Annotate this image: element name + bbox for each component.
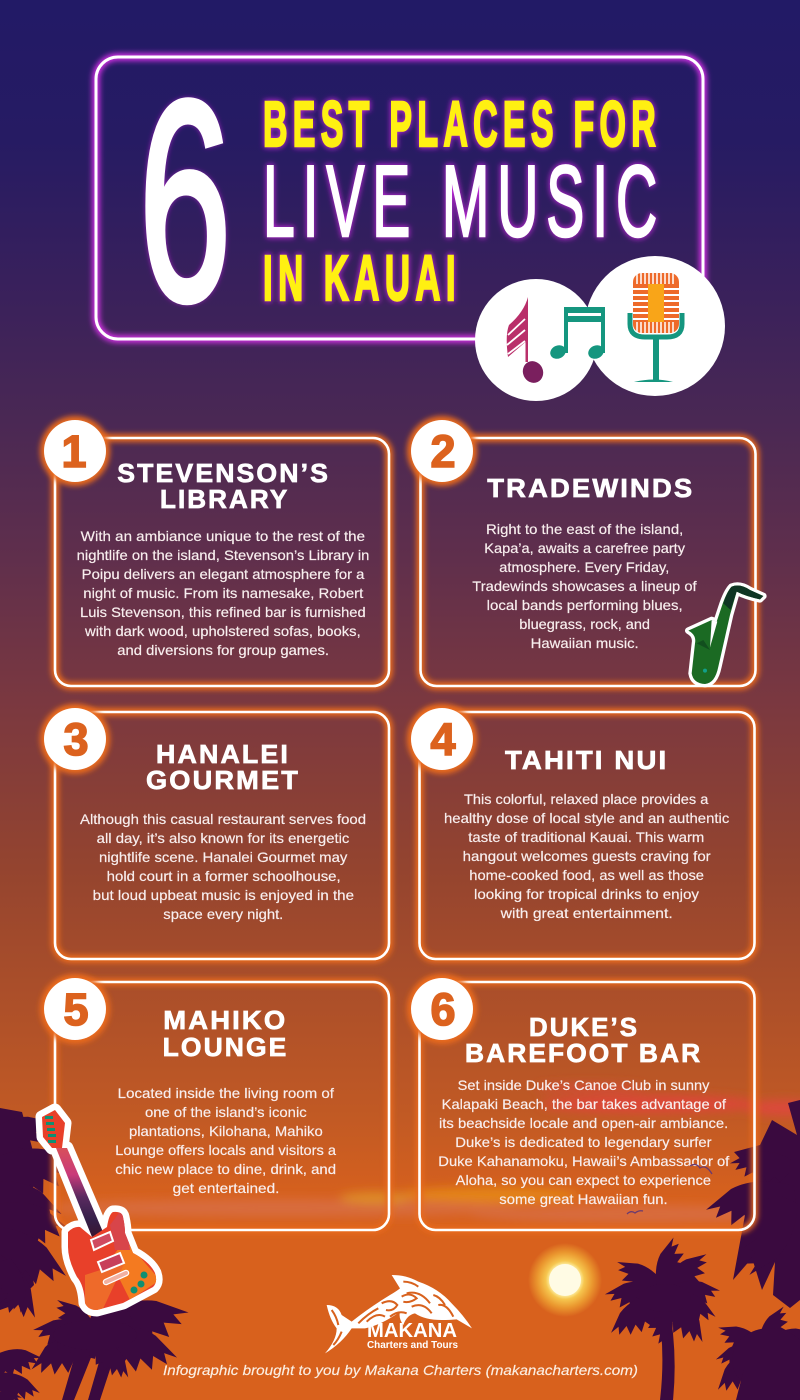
number badge 2: 2: [430, 426, 456, 477]
heading: GOURMET: [146, 767, 300, 795]
body text: Set inside Duke’s Canoe Club in sunny: [458, 1077, 709, 1093]
body text: Aloha, so you can expect to experience: [456, 1172, 711, 1188]
heading: [146, 741, 300, 795]
number badge 5: [40, 974, 110, 1044]
body text: night of music. From its namesake, Robert: [83, 585, 363, 601]
footer credit: Infographic brought to you by Makana Charters (makanacharters.com): [163, 1363, 638, 1378]
body text: plantations, Kilohana, Mahiko: [129, 1123, 323, 1139]
heading: TAHITI NUI: [505, 747, 668, 775]
body text: [444, 791, 729, 921]
icon: teal beamed notes: [548, 307, 606, 361]
body text: space every night.: [163, 906, 283, 922]
panel: Tradewinds: [407, 416, 763, 686]
panel: Mahiko Lounge: [40, 974, 389, 1230]
panel: Tahiti Nui: [407, 704, 754, 959]
body text: [80, 811, 366, 922]
title: [139, 43, 665, 360]
body text: nightlife scene. Hanalei Gourmet may: [99, 849, 347, 865]
body text: [438, 1077, 729, 1207]
body text: This colorful, relaxed place provides a: [464, 791, 709, 807]
heading: STEVENSON’S: [117, 460, 330, 488]
body text: Kapa’a, awaits a carefree party: [484, 540, 685, 556]
body text: one of the island’s iconic: [145, 1104, 307, 1120]
body text: chic new place to dine, drink, and: [115, 1161, 336, 1177]
heading: MAHIKO: [163, 1007, 287, 1035]
panel: Stevenson's Library: [40, 416, 389, 686]
title: IN KAUAI: [263, 242, 461, 314]
body text: get entertained.: [173, 1180, 279, 1196]
heading: [163, 1007, 288, 1062]
heading: [465, 1014, 702, 1068]
heading: LIBRARY: [160, 486, 289, 514]
number badge 6: [407, 974, 477, 1044]
body text: Tradewinds showcases a lineup of: [472, 578, 697, 594]
panel: Duke's Barefoot Bar: [407, 974, 754, 1230]
body text: Lounge offers locals and visitors a: [115, 1142, 336, 1158]
body text: atmosphere. Every Friday,: [499, 559, 669, 575]
body text: Poipu delivers an elegant atmosphere for a: [82, 566, 365, 582]
body text: and diversions for group games.: [117, 642, 329, 658]
sunset clouds: [40, 1084, 800, 1223]
body text: Luis Stevenson, this refined bar is furnished: [80, 604, 366, 620]
body text: [77, 528, 369, 658]
body text: Duke Kahanamoku, Hawaii’s Ambassador of: [438, 1153, 729, 1169]
body text: nightlife on the island, Stevenson’s Library in: [77, 547, 369, 563]
body text: Located inside the living room of: [118, 1085, 334, 1101]
body text: hangout welcomes guests craving for: [463, 848, 711, 864]
body text: Duke’s is dedicated to legendary surfer: [455, 1134, 712, 1150]
logo: Makana Charters and Tours: Charters and Tours: [367, 1340, 458, 1351]
body text: some great Hawaiian fun.: [499, 1191, 668, 1207]
heading: HANALEI: [156, 741, 290, 769]
title: 6: [139, 43, 231, 360]
number badge 3: 3: [63, 714, 89, 765]
heading: LOUNGE: [163, 1034, 288, 1062]
body text: all day, it’s also known for its energetic: [97, 830, 349, 846]
body text: Right to the east of the island,: [486, 521, 683, 537]
body text: home-cooked food, as well as those: [469, 867, 704, 883]
body text: [472, 521, 697, 651]
body text: [115, 1085, 336, 1196]
body text: local bands performing blues,: [487, 597, 683, 613]
body text: but loud upbeat music is enjoyed in the: [93, 887, 354, 903]
body text: hold court in a former schoolhouse,: [107, 868, 341, 884]
title: IN KAUAI: [263, 242, 461, 314]
number badge 4: 4: [430, 714, 456, 765]
icon: tribal dolphin: [325, 1275, 472, 1353]
body text: with great entertainment.: [500, 905, 673, 921]
icon: crimson eighth note: [507, 297, 547, 386]
body text: looking for tropical drinks to enjoy: [474, 886, 699, 902]
body text: Kalapaki Beach, the bar takes advantage of: [442, 1096, 726, 1112]
number badge 3: [40, 704, 110, 774]
palm trees right: [603, 1100, 800, 1400]
body text: with dark wood, upholstered sofas, books,: [84, 623, 361, 639]
body text: Although this casual restaurant serves food: [80, 811, 366, 827]
heading: TRADEWINDS: [487, 475, 694, 503]
number badge 5: 5: [63, 984, 89, 1035]
header panel: [96, 43, 703, 360]
number badge 4: [407, 704, 477, 774]
body text: bluegrass, rock, and: [519, 616, 650, 632]
body text: healthy dose of local style and an authentic: [444, 810, 729, 826]
body text: Hawaiian music.: [531, 635, 639, 651]
title: 6: [139, 43, 231, 360]
icon: birds: [627, 1164, 712, 1214]
body text: With an ambiance unique to the rest of the: [81, 528, 365, 544]
icon: saxophone: [688, 586, 763, 684]
heading: BAREFOOT BAR: [465, 1040, 702, 1068]
number badge 1: [40, 416, 110, 486]
palm trees left: [0, 1105, 195, 1400]
logo: Makana Charters and Tours: MAKANA: [367, 1320, 457, 1342]
heading: [117, 460, 330, 514]
logo: Makana Charters and Tours: [325, 1275, 472, 1353]
neon frame: [96, 57, 703, 339]
icon: microphone: [630, 273, 682, 382]
icons: music notes and microphone circles: [475, 256, 725, 401]
sun: [528, 1243, 602, 1317]
number badge 1: 1: [61, 426, 87, 477]
body text: its beachside locale and open-air ambiance.: [439, 1115, 728, 1131]
panel: Hanalei Gourmet: [40, 704, 389, 959]
number badge 6: 6: [430, 984, 456, 1035]
number badge 2: [407, 416, 477, 486]
icon: electric guitar: [42, 1110, 165, 1315]
body text: taste of traditional Kauai. This warm: [468, 829, 704, 845]
heading: DUKE’S: [529, 1014, 639, 1042]
